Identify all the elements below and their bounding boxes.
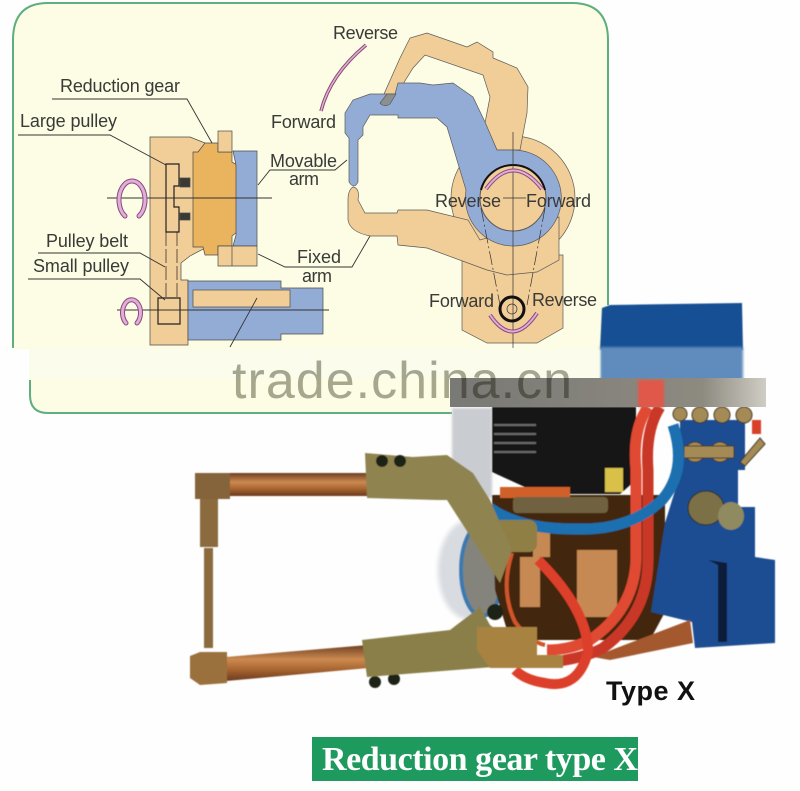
blue ring [461, 524, 503, 616]
caption: Type X: Type X [606, 676, 695, 706]
large pulley [166, 164, 179, 232]
contact tip [380, 94, 396, 106]
orange strip [500, 487, 570, 498]
watermark band [0, 349, 766, 415]
machine dark interior [492, 495, 665, 640]
labels: Large pulley [20, 111, 117, 131]
photo: welding gun [190, 303, 775, 688]
labels: Fixed [297, 247, 341, 267]
yellow label [605, 468, 623, 492]
labels: Movable [270, 151, 337, 171]
upper electrode block [195, 473, 230, 499]
servo motor [492, 407, 636, 494]
fittings row [513, 497, 608, 513]
tan large circle housing [451, 136, 575, 260]
bottom copper bar [593, 620, 693, 660]
labels: Reverse [333, 23, 398, 43]
panel: schematic background [13, 3, 608, 414]
centre lines and leader lines [18, 99, 370, 347]
icon: forward and reverse arc arrow [321, 45, 366, 111]
icon: small pulley rotation arrow [122, 300, 140, 323]
labels: Pulley belt [46, 231, 128, 251]
title badge: Reduction gear type X [322, 741, 638, 778]
icon: bottom rotation arrows [490, 313, 537, 332]
blue main body [651, 465, 775, 648]
inner disc [480, 165, 546, 231]
electrode [200, 499, 218, 648]
silver disc [438, 520, 502, 620]
tan shaft [193, 290, 290, 307]
black belt arc [481, 165, 545, 190]
silver plate [452, 408, 492, 498]
small pulley [158, 298, 180, 324]
icon: large pulley rotation arrow [119, 181, 145, 216]
labels: arm [302, 266, 332, 286]
red hoses [507, 407, 660, 684]
tan lower block [218, 246, 257, 266]
centre line [503, 132, 526, 348]
labels: Reduction gear [60, 76, 180, 96]
blue output flange [233, 151, 257, 246]
lower tan base [462, 255, 563, 343]
diagram: reduction gear cross-section [150, 131, 323, 345]
blue hose [490, 425, 678, 529]
red fitting [752, 420, 761, 434]
lower fittings [477, 627, 563, 668]
labels: Forward [526, 191, 591, 211]
labels: Reverse [532, 290, 597, 310]
small pulley [500, 297, 524, 321]
white blur strip [0, 349, 600, 378]
lower electrode block [190, 652, 227, 685]
fixed lower arm [348, 187, 559, 275]
labels: Forward [271, 112, 336, 132]
lower blue shaft housing [188, 281, 323, 340]
blue fitting plate [680, 420, 745, 470]
upper cast arm [365, 453, 512, 583]
labels: Reverse [435, 191, 501, 211]
tan top block [218, 131, 232, 152]
labels: Small pulley [33, 256, 129, 276]
labels: arm [289, 169, 319, 189]
blurred red hose in band [638, 380, 664, 407]
bearing marks [180, 178, 190, 220]
belt dashed lines [481, 208, 545, 305]
copper blocks [520, 528, 617, 617]
lower copper arm [226, 645, 368, 681]
movable blue arm [345, 83, 561, 246]
movable upper tan arm [380, 33, 528, 150]
labels [20, 23, 597, 311]
grey band [450, 378, 766, 407]
lower cast arm [362, 607, 510, 677]
blue upper block [600, 303, 743, 350]
black slot [708, 560, 727, 642]
brass fittings [673, 407, 765, 466]
labels: Forward [429, 291, 494, 311]
housing [150, 137, 205, 345]
diagram: welding arm schematic [345, 33, 575, 348]
brass tube upper [483, 520, 537, 552]
blurred blue block [600, 347, 743, 381]
pulley knob [688, 491, 744, 530]
left blank [0, 349, 29, 415]
icon: top rotation arrows [486, 170, 542, 189]
bolts [369, 455, 503, 688]
upper copper arm [228, 473, 374, 496]
reduction gear body [193, 143, 237, 255]
watermark text: trade.china.cn [232, 352, 572, 410]
